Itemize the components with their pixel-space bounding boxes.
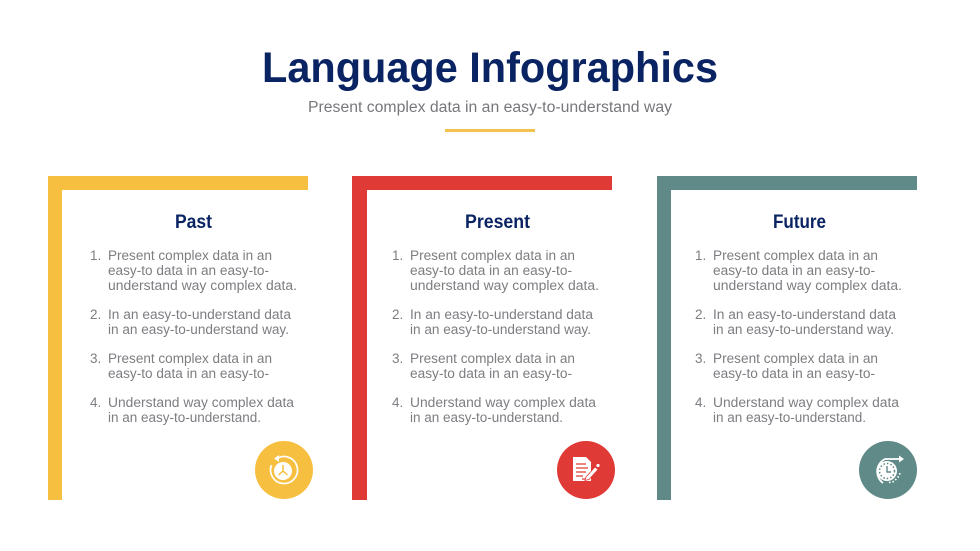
panel: future xyxy=(657,176,917,500)
list: future: 4. xyxy=(695,395,706,410)
list: past: in an easy-to-understand way. xyxy=(108,322,289,337)
icon: clock with return arrow xyxy=(255,441,313,499)
list: future xyxy=(695,248,902,425)
list: past: 1. xyxy=(90,248,101,263)
list: present: 2. xyxy=(392,307,403,322)
panel frame: future xyxy=(657,176,917,500)
subtitle: Present complex data in an easy-to-understand way xyxy=(308,99,672,116)
list: present: in an easy-to-understand. xyxy=(410,410,563,425)
title: Language Infographics xyxy=(262,44,718,92)
heading: present: Present xyxy=(465,212,531,233)
list: past: 3. xyxy=(90,351,101,366)
list: future: in an easy-to-understand. xyxy=(713,410,866,425)
panel frame: present xyxy=(352,176,612,500)
panel: past xyxy=(48,176,313,500)
list: present xyxy=(392,248,599,425)
list: future: easy-to data in an easy-to- xyxy=(713,366,875,381)
heading: future: Future xyxy=(773,212,826,233)
list: past: in an easy-to-understand. xyxy=(108,410,261,425)
title underline xyxy=(445,129,535,132)
list: future: easy-to data in an easy-to- xyxy=(713,263,875,278)
list: present: understand way complex data. xyxy=(410,278,599,293)
list: present: Understand way complex data xyxy=(410,395,596,410)
list: present: 1. xyxy=(392,248,403,263)
list: future: 2. xyxy=(695,307,706,322)
list: future: understand way complex data. xyxy=(713,278,902,293)
list: past: understand way complex data. xyxy=(108,278,297,293)
list: future: Understand way complex data xyxy=(713,395,899,410)
list: present: 4. xyxy=(392,395,403,410)
icon: document with pen xyxy=(557,441,615,499)
list: present: 3. xyxy=(392,351,403,366)
list: past: 4. xyxy=(90,395,101,410)
list: past: Understand way complex data xyxy=(108,395,294,410)
panel frame: past xyxy=(48,176,308,500)
list: present: Present complex data in an xyxy=(410,248,575,263)
heading: past: Past xyxy=(175,212,213,233)
list: past: easy-to data in an easy-to- xyxy=(108,263,269,278)
panel: present xyxy=(352,176,615,500)
list: past: Present complex data in an xyxy=(108,351,272,366)
list: past: easy-to data in an easy-to- xyxy=(108,366,269,381)
list: future: 3. xyxy=(695,351,706,366)
list: past xyxy=(90,248,297,425)
list: future: in an easy-to-understand way. xyxy=(713,322,894,337)
list: past: 2. xyxy=(90,307,101,322)
icon: stopwatch with forward arrow xyxy=(859,441,917,499)
list: past: In an easy-to-understand data xyxy=(108,307,291,322)
list: future: Present complex data in an xyxy=(713,351,878,366)
list: present: easy-to data in an easy-to- xyxy=(410,366,572,381)
list: present: in an easy-to-understand way. xyxy=(410,322,591,337)
list: past: Present complex data in an xyxy=(108,248,272,263)
list: future: 1. xyxy=(695,248,706,263)
list: present: Present complex data in an xyxy=(410,351,575,366)
list: present: easy-to data in an easy-to- xyxy=(410,263,572,278)
list: future: Present complex data in an xyxy=(713,248,878,263)
list: future: In an easy-to-understand data xyxy=(713,307,896,322)
list: present: In an easy-to-understand data xyxy=(410,307,593,322)
